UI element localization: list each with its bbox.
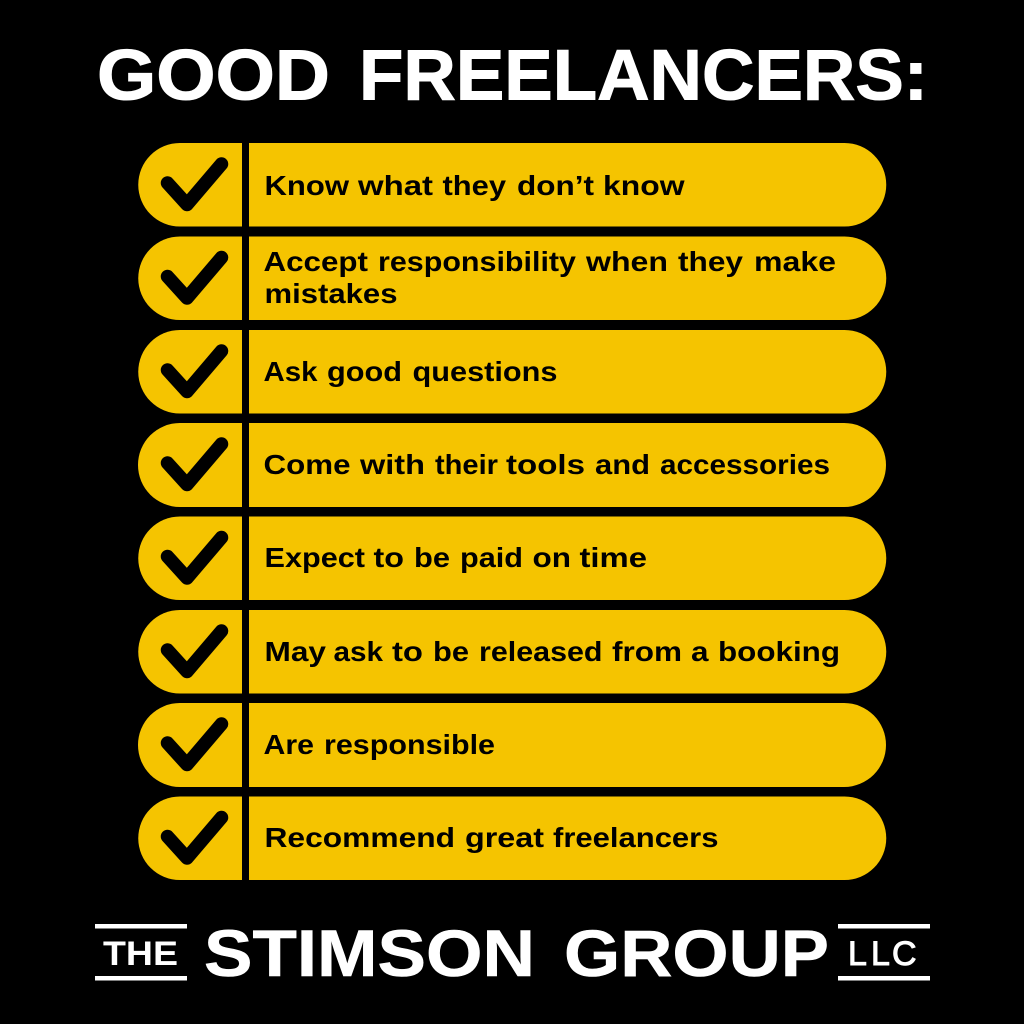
item 8: recommend great freelancers: Recommend (264, 822, 455, 853)
item 2: accept responsibility: mistakes (264, 278, 398, 309)
item 6: may ask to be released: from (612, 636, 682, 667)
item 8: recommend great freelancers (138, 796, 886, 880)
item 8: recommend great freelancers: great (465, 822, 544, 853)
item 4: come with their tools (138, 423, 886, 507)
item 4: come with their tools: accessories (660, 449, 830, 480)
item 2: accept responsibility: when (585, 246, 668, 277)
item 8: recommend great freelancers: freelancers (553, 822, 718, 853)
item 5: expect to be paid on time: time (580, 542, 647, 573)
item 3: ask good questions: questions (412, 356, 558, 387)
item 6: may ask to be released: released (479, 636, 602, 667)
logo: the stimson group llc: GROUP (564, 916, 829, 990)
item 6: may ask to be released: May (264, 636, 326, 667)
item 4: come with their tools: and (595, 449, 650, 480)
item 5: expect to be paid on time: to (374, 542, 404, 573)
logo: the stimson group llc: STIMSON (204, 916, 535, 990)
logo: the stimson group llc (95, 916, 930, 990)
item 6: may ask to be released (138, 610, 886, 694)
item 4: come with their tools: tools (506, 449, 585, 480)
item 6: may ask to be released: be (433, 636, 469, 667)
item 1: know what they don't know: know (603, 170, 685, 201)
item 4: come with their tools: their (435, 449, 498, 480)
item 4: come with their tools: Come (264, 449, 350, 480)
item 7: are responsible: responsible (324, 729, 495, 760)
checklist (138, 143, 886, 880)
item 3: ask good questions: Ask (264, 356, 318, 387)
item 6: may ask to be released: booking (718, 636, 840, 667)
title: GOOD (97, 36, 330, 116)
item 3: ask good questions (138, 330, 886, 414)
title: FREELANCERS: (359, 36, 928, 116)
item 4: come with their tools: with (359, 449, 425, 480)
item 1: know what they don't know: don’t (517, 170, 594, 201)
item 1: know what they don't know: Know (264, 170, 349, 201)
item 5: expect to be paid on time (138, 516, 886, 600)
item 5: expect to be paid on time: paid (460, 542, 523, 573)
item 2: accept responsibility: make (754, 246, 836, 277)
item 3: ask good questions: good (327, 356, 402, 387)
item 5: expect to be paid on time: on (532, 542, 571, 573)
item 5: expect to be paid on time: Expect (264, 542, 365, 573)
item 1: know what they don't know: what (357, 170, 433, 201)
item 7: are responsible: Are (264, 729, 314, 760)
item 6: may ask to be released: to (392, 636, 423, 667)
item 7: are responsible (138, 703, 886, 787)
item 5: expect to be paid on time: be (414, 542, 450, 573)
logo: the stimson group llc: THE (103, 935, 178, 973)
item 6: may ask to be released: ask (334, 636, 383, 667)
item 1: know what they don't know (138, 143, 886, 227)
logo: the stimson group llc: LLC (848, 935, 917, 973)
item 2: accept responsibility: responsibility (378, 246, 576, 277)
item 1: know what they don't know: they (442, 170, 506, 201)
item 2: accept responsibility: Accept (264, 246, 368, 277)
item 2: accept responsibility: they (678, 246, 743, 277)
item 6: may ask to be released: a (691, 636, 709, 667)
item 2: accept responsibility (138, 236, 886, 320)
